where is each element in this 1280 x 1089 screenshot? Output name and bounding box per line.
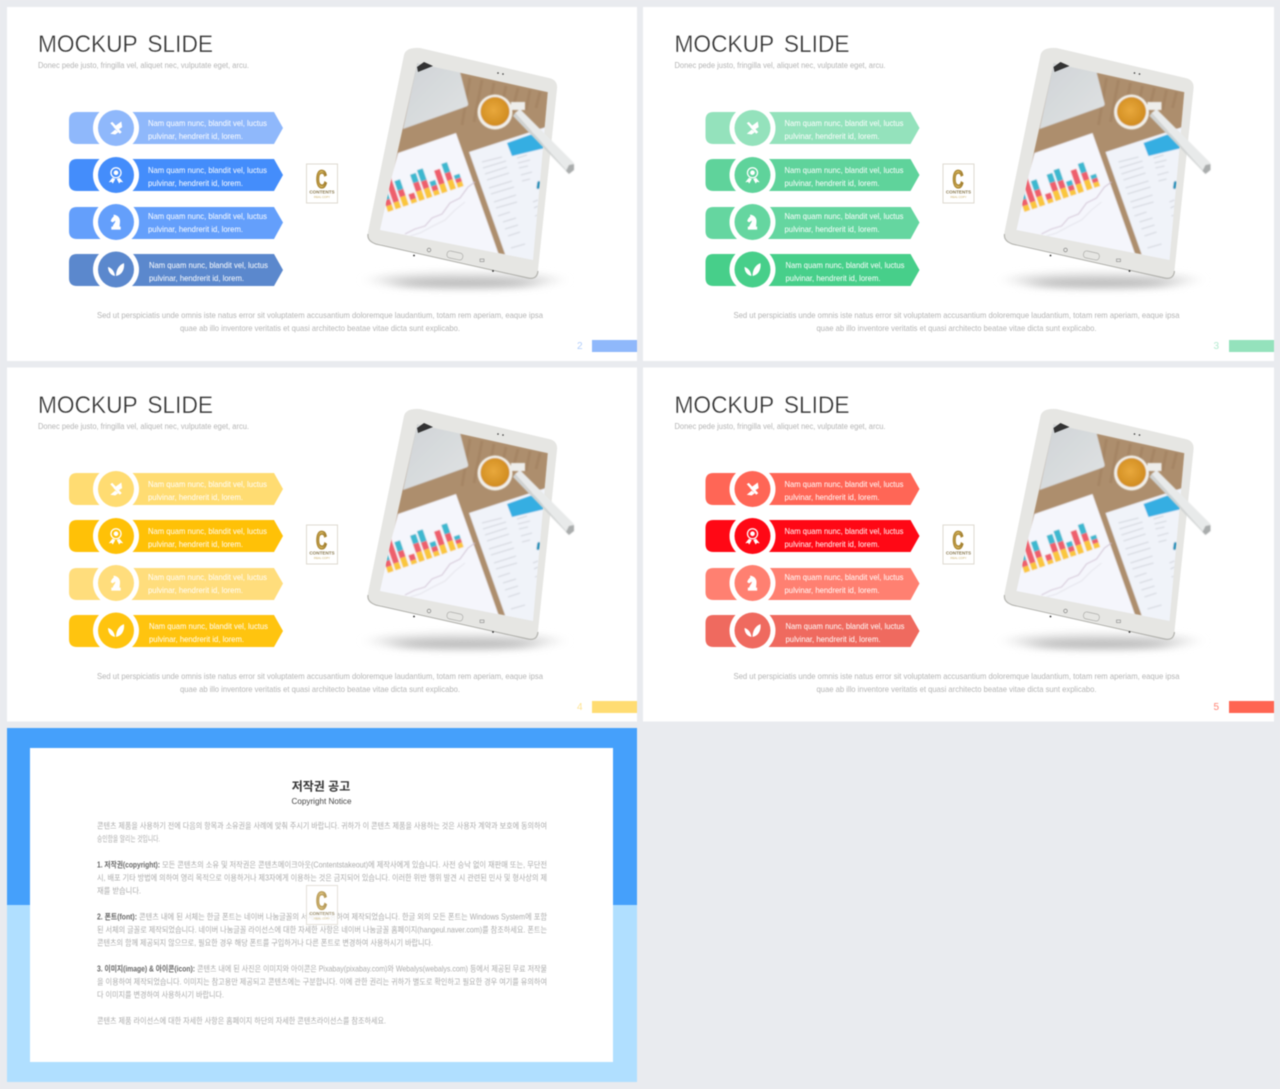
subtitle: Donec pede justo, fringilla vel, aliquet nec, vulputate eget, arcu. — [674, 422, 886, 431]
item 4: pulvinar, hendrerit id, lorem. — [149, 634, 244, 644]
closing note: 콘텐츠 제품 라이선스에 대한 자세한 사항은 홈페이지 하단의 자세한 콘텐츠라이선스를 참조하세요. — [97, 1016, 386, 1026]
item 1 — [69, 466, 283, 512]
item 4 — [69, 246, 283, 292]
page number: 5 — [1214, 702, 1220, 713]
tablet mockup — [1004, 409, 1210, 649]
item 2: pulvinar, hendrerit id, lorem. — [784, 178, 880, 188]
intro paragraph — [97, 820, 547, 844]
item 1: pulvinar, hendrerit id, lorem. — [784, 131, 880, 141]
item 2: pulvinar, hendrerit id, lorem. — [148, 539, 243, 549]
section 3: image and icon: 콘텐츠 내에 된 사진은 이미지와 아이콘은 Pixabay(pixabay.com)와 Webalys(webalys.com) 등에서 제공된 무료 저작물 — [197, 964, 547, 974]
footer text: quae ab illo inventore veritatis et quasi architecto beatae vitae dicta sunt explicabo. — [180, 323, 460, 333]
item 3: pulvinar, hendrerit id, lorem. — [148, 224, 243, 234]
footer text — [734, 310, 1180, 333]
section 1: copyright — [97, 860, 547, 896]
item 4: Nam quam nunc, blandit vel, luctus — [786, 621, 904, 631]
item 3 — [69, 560, 283, 606]
footer text: Sed ut perspiciatis unde omnis iste natus error sit voluptatem accusantium doloremque laudantium, totam rem aperiam, eaque ipsa — [734, 310, 1180, 320]
panel: red mockup slide — [643, 368, 1274, 722]
tablet mockup — [368, 48, 574, 288]
subtitle: Donec pede justo, fringilla vel, aliquet nec, vulputate eget, arcu. — [38, 61, 249, 70]
section 2: font: 콘텐츠 내에 된 서체는 한글 폰트는 네이버 나눔글꼴의 서체를 사용하여 제작되었습니다. 한글 외의 모든 폰트는 Windows System에 포함 — [139, 912, 547, 922]
item 1: Nam quam nunc, blandit vel, luctus — [784, 118, 904, 128]
section 2: font: 콘텐츠의 함께 제공되지 않으므로, 필요한 경우 해당 폰트를 구입하거나 다른 폰트로 변경하여 사용하시기 바랍니다. — [97, 938, 433, 948]
logo — [306, 164, 338, 203]
item 2: pulvinar, hendrerit id, lorem. — [148, 178, 243, 188]
item 1: Nam quam nunc, blandit vel, luctus — [148, 118, 267, 128]
footer text — [734, 671, 1180, 694]
title: MOCKUP SLIDE — [38, 393, 213, 419]
item 4: pulvinar, hendrerit id, lorem. — [149, 273, 244, 283]
footer text — [97, 671, 543, 694]
intro paragraph: 콘텐츠 제품을 사용하기 전에 다음의 항목과 소유권을 사례에 맞춰 주시기 바랍니다. 귀하가 이 콘텐츠 제품을 사용하는 것은 사용자 계약과 보호에 동의하여 — [97, 820, 547, 830]
section 1: copyright: 1. 저작권(copyright): — [97, 860, 160, 870]
item 1: Nam quam nunc, blandit vel, luctus — [148, 479, 267, 489]
footer text — [97, 310, 543, 333]
item 2: Nam quam nunc, blandit vel, luctus — [784, 526, 904, 536]
tablet mockup — [368, 409, 574, 649]
logo — [943, 164, 974, 203]
section 2: font: 2. 폰트(font): — [97, 912, 137, 922]
item 4: Nam quam nunc, blandit vel, luctus — [149, 260, 268, 270]
item 1 — [706, 105, 920, 151]
section 1: copyright: 모든 콘텐츠의 소유 및 저작권은 콘텐츠메이크아웃(Contentstakeout)에 제작사에게 있습니다. 사전 승낙 없이 재판매 또는, 무단전 — [162, 860, 547, 870]
panel: yellow mockup slide — [7, 368, 637, 722]
item 4 — [706, 246, 920, 292]
item 2: pulvinar, hendrerit id, lorem. — [784, 539, 880, 549]
item 3: pulvinar, hendrerit id, lorem. — [784, 224, 880, 234]
item 4: pulvinar, hendrerit id, lorem. — [786, 273, 880, 283]
footer text: Sed ut perspiciatis unde omnis iste natus error sit voluptatem accusantium doloremque laudantium, totam rem aperiam, eaque ipsa — [97, 310, 543, 320]
item 3: Nam quam nunc, blandit vel, luctus — [784, 211, 904, 221]
intro paragraph: 승인함을 알리는 것입니다. — [97, 834, 160, 844]
item 3: Nam quam nunc, blandit vel, luctus — [148, 211, 267, 221]
section 1: copyright: 시, 배포 기타 방법에 의하여 영리 목적으로 이용하거나 제3자에게 이용하는 것은 금지되어 있습니다. 이러한 위반 행위 발견 시 관련된 민사 및 형사상의 제 — [97, 872, 547, 882]
item 1: pulvinar, hendrerit id, lorem. — [784, 492, 880, 502]
panel: blue mockup slide — [7, 7, 637, 361]
tablet mockup — [1004, 48, 1210, 288]
footer text: Sed ut perspiciatis unde omnis iste natus error sit voluptatem accusantium doloremque laudantium, totam rem aperiam, eaque ipsa — [97, 671, 543, 681]
panel: copyright notice — [7, 728, 637, 1082]
footer text: quae ab illo inventore veritatis et quasi architecto beatae vitae dicta sunt explicabo. — [180, 684, 460, 694]
item 3: pulvinar, hendrerit id, lorem. — [784, 585, 880, 595]
item 4: Nam quam nunc, blandit vel, luctus — [786, 260, 904, 270]
footer text: quae ab illo inventore veritatis et quasi architecto beatae vitae dicta sunt explicabo. — [816, 323, 1096, 333]
title: MOCKUP SLIDE — [674, 32, 850, 58]
item 3 — [706, 199, 920, 245]
section 2: font: 된 서체의 글꼴로 제작되었습니다. 네이버 나눔글꼴 라이선스에 대한 자세한 사항은 네이버 나눔글꼴 홈페이지(hangeul.naver.com)를 참조하세요. 폰트는 — [97, 924, 547, 934]
subtitle: Donec pede justo, fringilla vel, aliquet nec, vulputate eget, arcu. — [38, 422, 249, 431]
item 4: pulvinar, hendrerit id, lorem. — [786, 634, 880, 644]
section 3: image and icon — [97, 964, 547, 1000]
page number — [1214, 701, 1274, 713]
item 4 — [706, 608, 920, 654]
item 1 — [69, 105, 283, 151]
section 2: font — [97, 912, 547, 948]
logo — [306, 886, 338, 924]
logo — [943, 525, 974, 564]
item 1: Nam quam nunc, blandit vel, luctus — [784, 479, 904, 489]
heading: copyright notice: 저작권 공고 — [292, 778, 350, 794]
item 2: Nam quam nunc, blandit vel, luctus — [784, 165, 904, 175]
item 1: pulvinar, hendrerit id, lorem. — [148, 131, 243, 141]
item 1 — [706, 466, 920, 512]
item 4: Nam quam nunc, blandit vel, luctus — [149, 621, 268, 631]
footer text: quae ab illo inventore veritatis et quasi architecto beatae vitae dicta sunt explicabo. — [816, 684, 1096, 694]
item 2: Nam quam nunc, blandit vel, luctus — [148, 526, 267, 536]
item 2 — [706, 513, 920, 559]
item 3: Nam quam nunc, blandit vel, luctus — [784, 572, 904, 582]
item 2 — [706, 152, 920, 198]
section 3: image and icon: 을 이용하여 제작되었습니다. 이미지는 참고용만 제공되고 콘텐츠에는 구분합니다. 이에 관한 권리는 귀하가 별도로 확인하고 필요한 경우 여기를 유의하여 — [97, 976, 547, 986]
item 3: pulvinar, hendrerit id, lorem. — [148, 585, 243, 595]
logo — [306, 525, 338, 564]
subheading: Copyright Notice — [292, 796, 352, 806]
section 1: copyright: 재를 받습니다. — [97, 886, 141, 896]
title: MOCKUP SLIDE — [674, 393, 850, 419]
item 3 — [69, 199, 283, 245]
title: MOCKUP SLIDE — [38, 32, 213, 58]
item 3: Nam quam nunc, blandit vel, luctus — [148, 572, 267, 582]
panel: green mockup slide — [643, 7, 1274, 361]
item 2 — [69, 152, 283, 198]
section 3: image and icon: 3. 이미지(image) & 아이콘(icon): — [97, 964, 195, 974]
page number — [577, 701, 637, 713]
page number — [577, 340, 637, 352]
item 3 — [706, 560, 920, 606]
item 1: pulvinar, hendrerit id, lorem. — [148, 492, 243, 502]
page number: 3 — [1214, 341, 1220, 352]
page number: 2 — [577, 341, 583, 352]
page number — [1214, 340, 1274, 352]
section 3: image and icon: 다 이미지를 변경하여 사용하시기 바랍니다. — [97, 990, 224, 1000]
item 2 — [69, 513, 283, 559]
page number: 4 — [577, 702, 583, 713]
item 2: Nam quam nunc, blandit vel, luctus — [148, 165, 267, 175]
footer text: Sed ut perspiciatis unde omnis iste natus error sit voluptatem accusantium doloremque laudantium, totam rem aperiam, eaque ipsa — [734, 671, 1180, 681]
item 4 — [69, 608, 283, 654]
subtitle: Donec pede justo, fringilla vel, aliquet nec, vulputate eget, arcu. — [674, 61, 886, 70]
